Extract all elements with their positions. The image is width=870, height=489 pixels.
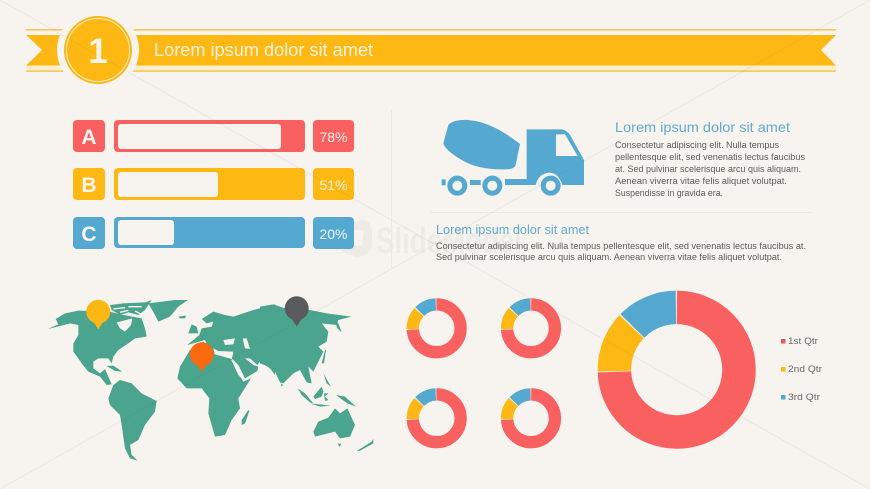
donut small 1 — [413, 304, 461, 352]
header ribbon — [26, 9, 836, 91]
bar row A — [73, 120, 354, 152]
text block: second description: Consectetur adipiscing elit. Nulla tempus pellentesque elit, sed venenatis lectus faucibus at. — [436, 241, 806, 251]
bar row B: B — [81, 174, 97, 197]
text block: second description: Lorem ipsum dolor sit amet — [436, 223, 590, 237]
map pin: grey — [285, 296, 309, 326]
ribbon title: Lorem ipsum dolor sit amet — [154, 40, 373, 60]
map pin: yellow — [86, 300, 110, 330]
donut small 3 — [413, 394, 461, 442]
bar row B — [73, 168, 354, 200]
donut small 4 — [507, 394, 555, 442]
text block: truck description: Lorem ipsum dolor sit amet — [615, 119, 790, 135]
bar row A: A — [81, 126, 97, 149]
bar row C — [73, 217, 354, 249]
world map — [48, 300, 373, 461]
legend — [781, 336, 822, 403]
bar row C: C — [81, 223, 97, 246]
text block: truck description — [615, 119, 806, 198]
text block: truck description: Aenean viverra vitae felis aliquet volutpat. — [615, 176, 787, 186]
legend: 3rd Qtr — [788, 392, 820, 403]
icon: cement mixer truck — [442, 120, 584, 193]
bar row B: 51% — [319, 177, 348, 193]
legend: 2nd Qtr — [788, 364, 822, 375]
text block: second description — [436, 223, 806, 262]
donut small 2 — [507, 304, 555, 352]
number badge — [57, 9, 139, 91]
text block: truck description: Consectetur adipiscing elit. Nulla tempus — [615, 140, 779, 150]
watermark: SlideModel — [376, 220, 522, 261]
map pin: orange — [190, 342, 214, 372]
bar row C: 20% — [319, 226, 348, 242]
watermark — [342, 220, 522, 261]
text block: truck description: Suspendisse in gravida era. — [615, 188, 723, 198]
number badge: 1 — [88, 32, 108, 71]
bar row A: 78% — [319, 129, 348, 145]
text block: truck description: pellentesque elit, sed venenatis lectus faucibus — [615, 152, 806, 162]
legend: 1st Qtr — [788, 336, 818, 347]
text block: second description: Sed pulvinar scelerisque arcu quis aliquam. Aenean viverra vitae felis aliquet volutpat. — [436, 252, 782, 262]
donut large — [614, 307, 739, 432]
text block: truck description: at. Sed pulvinar scelerisque arcu quis aliquam. — [615, 164, 801, 174]
